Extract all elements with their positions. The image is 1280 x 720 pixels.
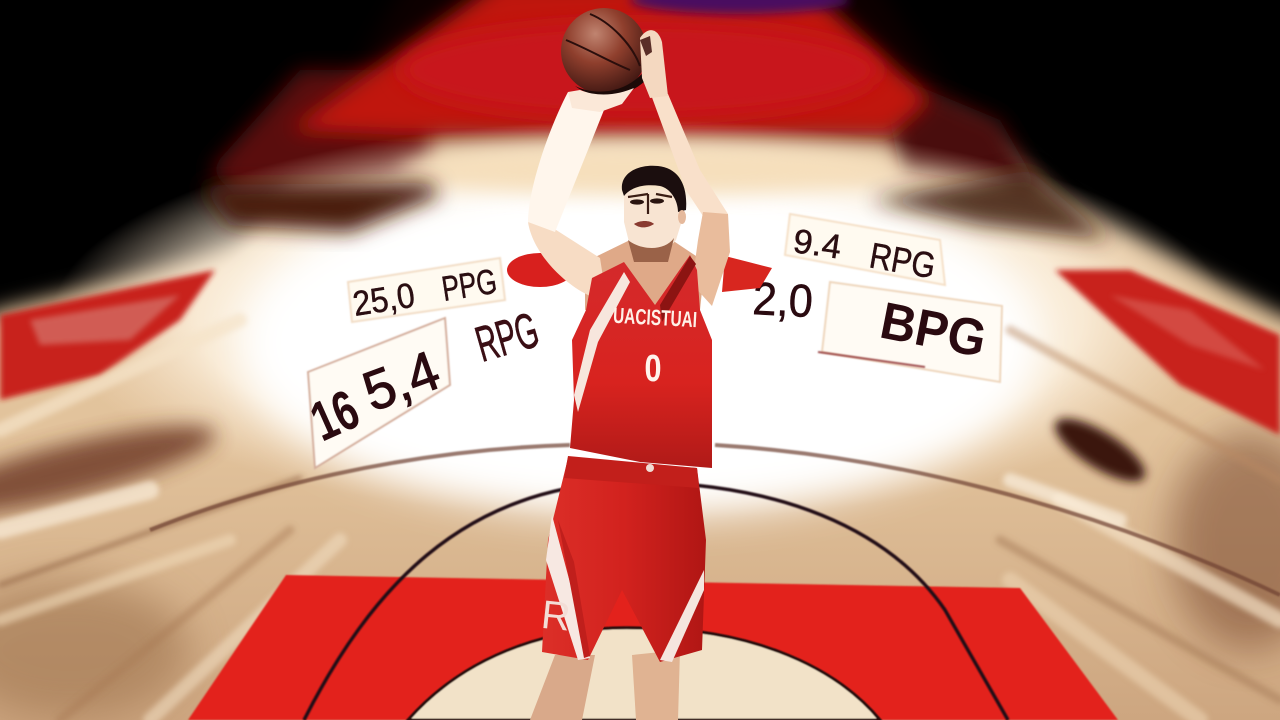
three point arc [150,445,1280,595]
left forearm [528,92,604,232]
waistband logo [646,464,654,472]
right dark corner [860,0,1280,330]
jersey wordmark: UACISTUAI [613,303,698,332]
stat card: 25.0 PPG [348,258,505,324]
stat card: 9.4 RPG [785,214,945,286]
shoulders and neck [585,240,705,310]
jersey trim left [574,272,630,412]
court markings [150,445,1280,720]
ear [678,210,686,224]
stat card: 2.0 BPG [751,272,1002,382]
right upper arm [692,212,730,306]
free throw circle [304,482,1008,720]
jersey [570,255,712,468]
eyes and mouth [628,194,672,214]
face [624,190,684,252]
stat card: 9.4 RPG: RPG [867,235,939,286]
hands [568,88,634,112]
inner wood semicircle [408,628,880,720]
central glow [50,120,1230,520]
stat card: 2.0 BPG: BPG [876,292,991,369]
motion streaks on the floor [0,320,1280,720]
stat card: 25.0 PPG: 25,0 [350,276,417,324]
left dark corner [0,0,420,330]
dark streak smudges beside the player [200,183,440,232]
paint: red key [188,575,1118,720]
lower legs [530,655,595,720]
basketball [561,8,647,94]
red top band [290,0,930,135]
stat card: 9.4 RPG: 9.4 [791,222,844,267]
stat card: 16 5,4 RPG: 16 [301,377,368,453]
player: R [539,593,573,640]
stat card: 16 5,4 RPG: 5,4 [355,338,448,423]
rim: red ellipse behind the player [507,253,772,292]
dark arena top [0,0,1280,130]
shorts [542,458,706,662]
side red panels [0,270,215,400]
stat card: 16 5,4 RPG: RPG [470,302,545,373]
right forearm [650,92,728,216]
dark red flanks of top band [210,70,430,200]
stat card: 16 5,4 RPG [301,302,545,468]
shorts stripes [546,515,590,660]
hair [622,166,686,212]
jersey number: 0 [644,348,662,390]
stat card: 25.0 PPG: PPG [439,262,500,309]
left upper arm [528,222,606,296]
player [528,8,730,720]
jersey trim right [660,256,696,322]
stat card: 2.0 BPG: 2,0 [751,272,814,327]
